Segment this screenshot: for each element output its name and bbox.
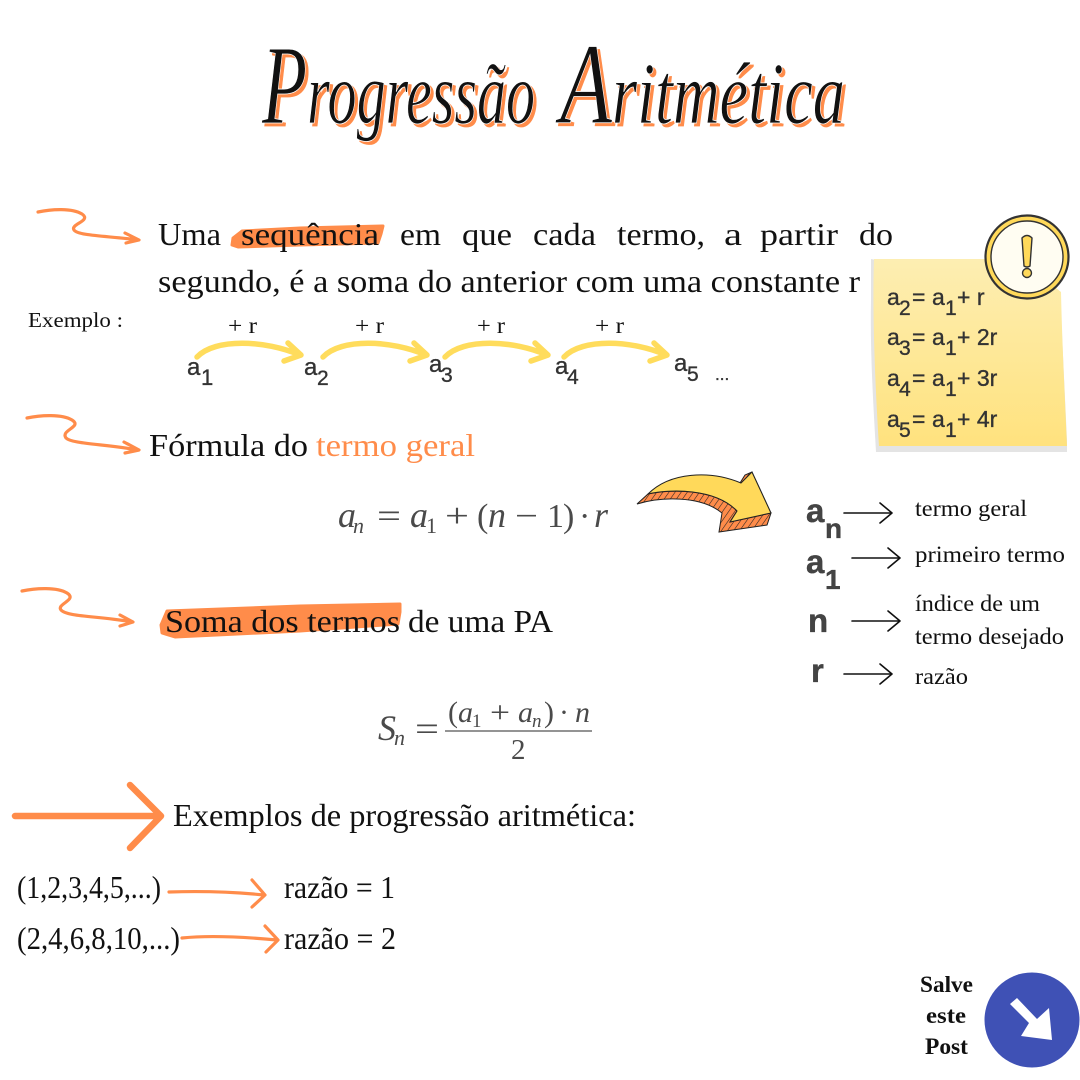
legend: r: razão <box>915 664 968 689</box>
heading: sum: de uma PA <box>408 603 553 639</box>
formula: sum: a <box>458 696 473 729</box>
formula: sum: n <box>575 696 590 729</box>
save label: este <box>926 1003 966 1028</box>
example: ratio 2: razão = 2 <box>284 920 396 956</box>
formula: general term: · <box>579 498 590 535</box>
formula: sum <box>378 696 592 766</box>
note formulas: a <box>932 365 945 391</box>
formula: sum: ( <box>448 696 458 729</box>
title: Progressão <box>261 24 535 148</box>
formula: general term: n <box>353 513 364 538</box>
formula: general term: n <box>488 495 506 535</box>
sequence diagram: a <box>429 351 443 378</box>
sequence diagram: + r <box>355 313 384 338</box>
sequence diagram: 5 <box>687 363 699 386</box>
note formulas: 5 <box>899 419 911 442</box>
heading: general term: termo geral <box>316 427 475 463</box>
legend: n: termo desejado <box>915 624 1064 649</box>
title: Aritmética <box>555 21 845 149</box>
note formulas: a <box>887 365 900 391</box>
definition text: a <box>724 216 742 252</box>
heading: general term: Fórmula do <box>149 427 308 463</box>
formula: general term <box>338 495 609 538</box>
example: ratio 2 <box>17 920 396 956</box>
formula: general term: r <box>594 495 609 535</box>
definition text: Uma <box>158 216 221 252</box>
example label: Exemplo : <box>28 308 123 332</box>
formula: general term: a <box>410 495 428 535</box>
heading: sum: Soma dos termos <box>165 603 400 639</box>
formula: general term: 1 <box>426 513 437 538</box>
note formulas: a <box>932 284 945 310</box>
formula: general term: a <box>338 495 356 535</box>
heading: general term <box>149 427 475 463</box>
note formulas: + r <box>957 284 985 310</box>
sequence diagram: 4 <box>567 366 579 389</box>
sequence diagram: a <box>555 353 569 380</box>
note formulas: a <box>932 324 945 350</box>
sequence diagram: a <box>304 354 318 381</box>
example: ratio 2: (2,4,6,8,10,...) <box>17 920 180 956</box>
arrow: sum <box>22 589 133 626</box>
note formulas: 1 <box>945 337 957 360</box>
icon: exclamation badge <box>986 216 1068 298</box>
formula: sum: S <box>378 708 396 748</box>
sticky note <box>871 216 1068 452</box>
formula: sum: + <box>490 696 510 729</box>
legend: n <box>808 591 1064 649</box>
note formulas: 2 <box>899 297 911 320</box>
note formulas: + 2r <box>957 324 998 350</box>
formula: sum: = <box>415 711 439 748</box>
formula: sum: n <box>532 711 542 732</box>
note formulas: = <box>912 406 925 432</box>
legend: a_1: 1 <box>825 564 841 595</box>
heading: examples: Exemplos de progressão aritmética: <box>173 797 636 833</box>
note formulas: + 4r <box>957 406 998 432</box>
legend: a_n: termo geral <box>915 496 1027 521</box>
example: ratio 1 <box>17 869 395 907</box>
arrow: general term <box>27 416 139 453</box>
legend: n: índice de um <box>915 591 1040 616</box>
sequence diagram: 1 <box>201 365 213 390</box>
definition text: do <box>859 216 893 252</box>
definition text: partir <box>760 216 838 252</box>
note formulas: a <box>887 406 900 432</box>
legend: r <box>811 652 968 689</box>
formula: general term: = <box>377 498 401 535</box>
formula: sum: · <box>559 696 569 729</box>
sequence diagram: 3 <box>441 364 453 387</box>
save label: Salve <box>920 972 973 997</box>
formula: general term: + <box>445 498 469 535</box>
highlight: soma dos termos <box>161 604 400 637</box>
note formulas: = <box>912 365 925 391</box>
legend: a_1: a <box>806 543 825 580</box>
sequence diagram: a <box>187 354 201 381</box>
big 3D arrow <box>637 472 771 532</box>
note formulas: a <box>887 284 900 310</box>
note formulas: a <box>932 406 945 432</box>
legend <box>806 492 1065 689</box>
note formulas: 1 <box>945 378 957 401</box>
highlight: sequência <box>232 226 383 247</box>
save label <box>920 972 973 1059</box>
sequence diagram: + r <box>595 313 624 338</box>
icon: save button <box>984 972 1080 1068</box>
save label: Post <box>925 1034 968 1059</box>
sequence diagram <box>187 313 729 390</box>
note formulas: = <box>912 284 925 310</box>
title <box>261 21 845 149</box>
definition text <box>158 216 893 299</box>
formula: sum: 2 <box>511 734 526 766</box>
heading: sum <box>165 603 553 639</box>
sequence diagram: ... <box>715 365 729 384</box>
note formulas: a <box>887 324 900 350</box>
note formulas: 1 <box>945 297 957 320</box>
formula: general term: ) <box>563 498 574 535</box>
legend: n: n <box>808 602 828 639</box>
note formulas: 3 <box>899 337 911 360</box>
note formulas: 4 <box>899 378 911 401</box>
definition text: que <box>462 216 512 252</box>
definition text: cada <box>533 216 596 252</box>
legend: a_n: a <box>806 492 825 529</box>
note formulas: + 3r <box>957 365 998 391</box>
formula: sum: n <box>394 725 405 750</box>
legend: a_n: n <box>825 513 842 544</box>
definition text: em <box>400 216 441 252</box>
sequence diagram: a <box>674 350 688 377</box>
sequence diagram: + r <box>228 313 257 338</box>
sequence diagram: + r <box>477 313 505 338</box>
formula: general term: − <box>515 498 538 535</box>
sequence diagram: 2 <box>317 367 329 390</box>
formula: sum: ) <box>544 696 554 729</box>
legend: a_1: primeiro termo <box>915 542 1065 567</box>
example: ratio 1: razão = 1 <box>284 869 395 905</box>
legend: r: r <box>811 652 824 689</box>
note formulas: = <box>912 324 925 350</box>
formula: general term: ( <box>477 498 488 535</box>
definition text: segundo, é a soma do anterior com uma constante r <box>158 263 860 299</box>
note formulas <box>887 284 998 442</box>
definition text: sequência <box>241 216 379 252</box>
legend: a_n <box>806 492 1027 544</box>
example: ratio 1: (1,2,3,4,5,...) <box>17 869 161 905</box>
big arrow: examples <box>15 785 161 848</box>
legend: a_1 <box>806 542 1065 595</box>
formula: general term: 1 <box>547 498 564 535</box>
arrow: definition <box>38 210 139 243</box>
definition text: termo, <box>617 216 705 252</box>
formula: sum: 1 <box>472 711 482 732</box>
formula: sum: a <box>518 696 533 729</box>
note formulas: 1 <box>945 419 957 442</box>
